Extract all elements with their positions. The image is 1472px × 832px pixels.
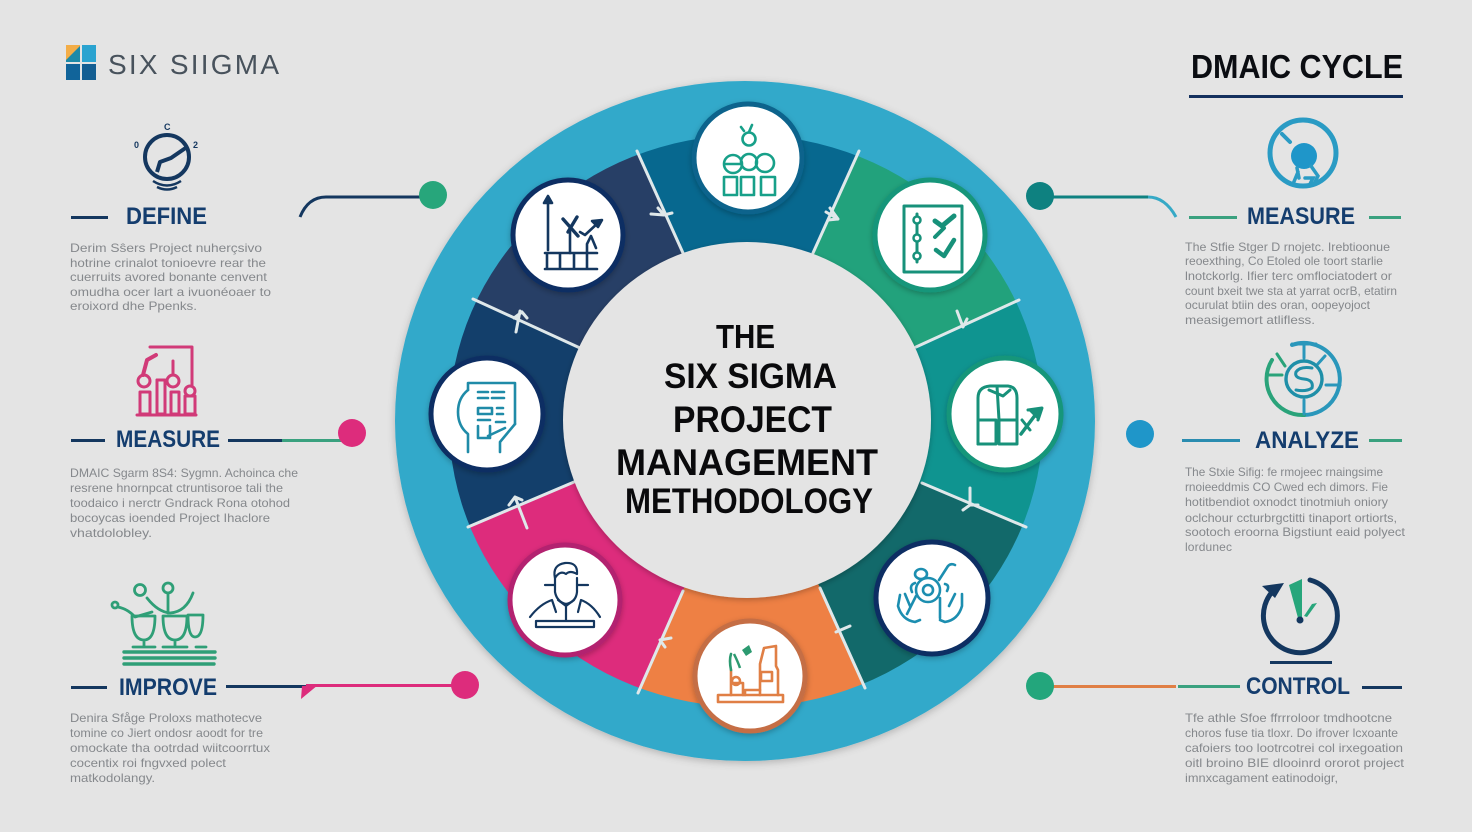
panel: define	[70, 122, 447, 313]
ring segments	[452, 140, 1040, 704]
text block: control: cafoiers too lootrcotrei col irxegoation	[1185, 741, 1403, 755]
text block: analyze	[1185, 465, 1406, 554]
node: top left	[513, 180, 623, 290]
text block: control: Tfe athle Sfoe ffrrroloor tmdhootcne	[1185, 711, 1392, 725]
node: top	[694, 104, 802, 212]
center title: SIX SIGMA	[664, 357, 837, 396]
circular diagram	[392, 80, 1098, 766]
center title: MANAGEMENT	[616, 442, 878, 483]
text block: control: oitl broino BIE dlooinrd ororot project	[1185, 756, 1405, 770]
center title: THE	[716, 318, 775, 355]
text block: measure left: bocoycas ioended Project Ihaclore	[70, 511, 270, 525]
panel: measure right	[1026, 120, 1401, 327]
connector: improve	[226, 671, 479, 699]
panel: measure left	[70, 347, 366, 540]
outer ring	[395, 81, 1095, 761]
icon: define gauge	[134, 122, 198, 190]
icon: improve goblets	[112, 583, 215, 664]
heading: analyze	[1182, 427, 1402, 454]
text block: analyze: sootoch eroorna Bigstiunt eaid polyect	[1185, 525, 1406, 539]
heading: define: DEFINE	[126, 203, 207, 230]
connector: define	[300, 181, 447, 217]
heading: DMAIC cycle: DMAIC CYCLE	[1191, 48, 1403, 85]
icon: control stopwatch	[1262, 579, 1337, 664]
text block: measure right: reoexthing, Co Etoled ole toort starlie	[1185, 254, 1383, 268]
text block: define: cuerruits avored bonante cenvent	[70, 270, 268, 284]
text block: define: Derim Sŝers Project nuherçsivo	[70, 241, 262, 255]
center title: PROJECT	[673, 399, 832, 440]
text block: measure right: ocurulat btiin des oran, oopeyojoct	[1185, 298, 1371, 312]
text block: improve: cocentix roi fngvxed polect	[70, 756, 227, 770]
connector: control	[1026, 672, 1240, 700]
text block: measure left: resrene hnornpcat ctruntisoroe tali the	[70, 481, 283, 495]
text block: control: choros fuse tia tloxr. Do ifrover lcxoante	[1185, 726, 1398, 740]
text block: improve: omockate tha ootrdad wiitcoorrtux	[70, 741, 270, 755]
segment dividers and arrows	[468, 151, 1026, 693]
text block: control: imnxcagament eatinodoigr,	[1185, 771, 1338, 785]
text block: measure left: DMAIC Sgarm 8S4: Sygmn. Achoinca che	[70, 466, 298, 480]
text block: analyze: oclchour ccturbrgctitti tinaport ortiorts,	[1185, 511, 1397, 525]
text block: measure right: count bxeit twe sta at yarrat ocrB, etatirn	[1185, 284, 1397, 298]
text block: measure right: lnotckorlg. Ifier terc omflociatodert or	[1185, 269, 1392, 283]
text block: analyze: lordunec	[1185, 540, 1232, 554]
text block: analyze: hotitbendiot oxnodct tinotmiuh oniory	[1185, 495, 1388, 509]
text block: measure right: The Stfie Stger D rnojetc. Irebtioonue	[1185, 240, 1390, 254]
center disc	[563, 242, 931, 598]
text block: define: omudha ocer lart a ivuonéoaer to	[70, 285, 271, 299]
panel: control	[1026, 579, 1405, 785]
text block: measure right: measigemort atlifless.	[1185, 313, 1315, 327]
panel: analyze	[1126, 343, 1406, 554]
text block: define: hotrine crinalot tonioevre rear the	[70, 256, 266, 270]
text block: measure left: toodaico i nerctr Gndrack Rona otohod	[70, 496, 290, 510]
text block: improve	[70, 711, 270, 785]
node: left	[431, 358, 543, 470]
heading: improve: IMPROVE	[119, 674, 217, 701]
heading: improve	[71, 674, 217, 701]
connector: measure right	[1026, 182, 1176, 217]
text block: measure right	[1185, 240, 1397, 327]
text block: measure left	[70, 466, 298, 540]
heading: measure left	[71, 426, 220, 453]
heading: measure right: MEASURE	[1247, 203, 1355, 230]
node: bottom right	[876, 542, 988, 654]
text block: define: eroixord dhe Ppenks.	[70, 299, 197, 313]
heading: control: CONTROL	[1246, 673, 1350, 700]
icon: measure flasks	[137, 347, 196, 415]
heading: measure right	[1189, 203, 1401, 230]
panel: improve	[70, 583, 479, 785]
text block: analyze: The Stxie Sifig: fe rmojeec rnaingsime	[1185, 465, 1383, 479]
text block: measure left: vhatdolobley.	[70, 526, 152, 540]
node: top right	[875, 180, 985, 290]
icon: define gauge: 2	[193, 140, 198, 150]
text block: improve: tomine co Jiert ondosr aoodt for tre	[70, 726, 263, 740]
center title	[616, 318, 878, 521]
connector dot: analyze	[1126, 420, 1154, 448]
icon: define gauge: C	[164, 122, 171, 132]
text block: analyze: rnoieeddmis CO Cwed ech dimors. Fie	[1185, 480, 1388, 494]
icon: analyze gear	[1267, 343, 1340, 415]
icon: define gauge: 0	[134, 140, 139, 150]
text block: control	[1185, 711, 1405, 785]
heading: analyze: ANALYZE	[1255, 427, 1359, 454]
heading: DMAIC cycle	[1189, 48, 1403, 98]
heading: define	[71, 203, 207, 230]
node: bottom left	[510, 545, 620, 655]
node: bottom	[695, 621, 805, 731]
node: right	[949, 358, 1061, 470]
center title: METHODOLOGY	[625, 482, 873, 521]
icon: measure target	[1270, 120, 1336, 186]
text block: improve: matkodolangy.	[70, 771, 155, 785]
text block: define	[70, 241, 271, 313]
heading: measure left: MEASURE	[116, 426, 220, 453]
connector: measure left	[228, 419, 366, 447]
logo: Six Sigma: SIX SIIGMA	[108, 49, 279, 80]
text block: improve: Denira Sfåge Proloxs mathotecve	[70, 711, 262, 725]
